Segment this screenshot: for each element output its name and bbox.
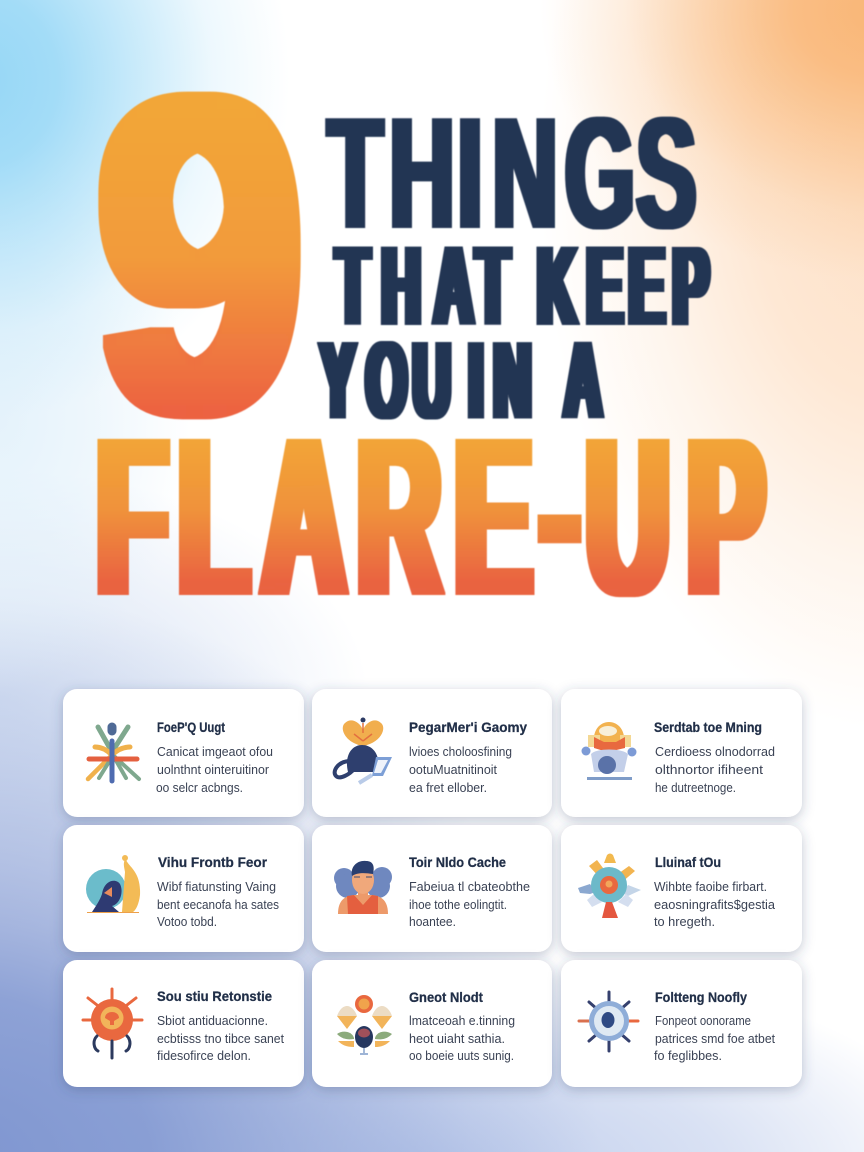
panel: card 1 (63, 689, 304, 817)
panel: card 4 (63, 825, 304, 952)
card text: oo selcr acbngs. (156, 780, 243, 795)
card text: Sbiot antiduacionne. (157, 1013, 268, 1028)
icon: person portrait (334, 861, 392, 914)
icon: heart and dome (335, 718, 392, 783)
card text (157, 854, 279, 929)
heading line: THAT KEEP: THAT KEEP (336, 223, 709, 349)
card text: fo feglibbes. (654, 1048, 722, 1063)
card text: uolnthnt ointeruitinor (157, 762, 270, 777)
card text: Gneot Nlodt (409, 989, 483, 1005)
title (97, 5, 764, 642)
card text: fidesofirce delon. (157, 1048, 251, 1063)
icon: domed figure (582, 722, 636, 780)
card text: he dutreetnoge. (655, 780, 736, 795)
panel: card 5 (312, 825, 552, 952)
card text: Wibf fiatunsting Vaing (157, 879, 276, 894)
panel: card 3 (561, 689, 802, 817)
card text: Cerdioess olnodorrad (655, 744, 775, 759)
panel: card 8 (312, 960, 552, 1087)
heading line: YOU IN A: YOU IN A (320, 319, 602, 442)
card text: PegarMer'i Gaomy (409, 719, 527, 735)
card text: oo boeie uuts sunig. (409, 1048, 514, 1063)
card text: Fonpeot oonorame (655, 1013, 751, 1028)
card text: Votoo tobd. (157, 914, 217, 929)
card text (409, 989, 515, 1063)
panel: card 6 (561, 825, 802, 952)
card text: Foltteng Noofly (655, 989, 747, 1005)
card text: Vihu Frontb Feor (158, 854, 268, 870)
card text: patrices smd foe atbet (655, 1031, 775, 1046)
card text: Toir Nldo Cache (409, 854, 506, 870)
heading line: FLARE-UP: FLARE-UP (97, 384, 764, 642)
card text: ihoe tothe eolingtit. (409, 897, 507, 912)
card text (409, 719, 527, 795)
card text (654, 719, 775, 795)
card text: Serdtab toe Mning (654, 719, 762, 735)
card text (654, 989, 775, 1063)
panel: card 9 (561, 960, 802, 1087)
panel: card 7 (63, 960, 304, 1087)
card text: eaosningrafits$gestia (654, 897, 776, 912)
card text (156, 719, 273, 795)
card text: Sou stiu Retonstie (157, 988, 272, 1004)
card text: FoeP'Q Uugt (157, 719, 225, 735)
icon: crossed sticks (88, 727, 139, 781)
icon: orange sun (83, 989, 142, 1058)
heading line: THINGS: THINGS (328, 86, 696, 262)
icon: teal sun (578, 854, 641, 918)
card text: hoantee. (409, 914, 456, 929)
card text: heot uiaht sathia. (409, 1031, 505, 1046)
big numeral 9: 9 (97, 5, 303, 504)
card text (654, 854, 776, 929)
card text: ea fret ellober. (409, 780, 487, 795)
card text: olthnortor ifiheent (655, 762, 763, 777)
panel: card 2 (312, 689, 552, 817)
card text (409, 854, 530, 929)
icon: compass wheel (579, 992, 638, 1051)
card text: bent eecanofa ha sates (157, 897, 279, 912)
card text: Lluinaf tOu (655, 854, 721, 870)
card text: ecbtisss tno tibce sanet (157, 1031, 284, 1046)
card text: Canicat imgeaot ofou (157, 744, 273, 759)
card text: Fabeiua tl cbateobthe (409, 879, 530, 894)
card text: Wihbte faoibe firbart. (654, 879, 767, 894)
card text: lvioes choloosfining (409, 744, 512, 759)
card text: lmatceoah e.tinning (409, 1013, 515, 1028)
card text (157, 988, 284, 1063)
icon: person with teal circle (86, 855, 140, 913)
card text: to hregeth. (654, 914, 715, 929)
icon: plant and sun (337, 995, 392, 1054)
card text: ootuMuatnitinoit (409, 762, 497, 777)
